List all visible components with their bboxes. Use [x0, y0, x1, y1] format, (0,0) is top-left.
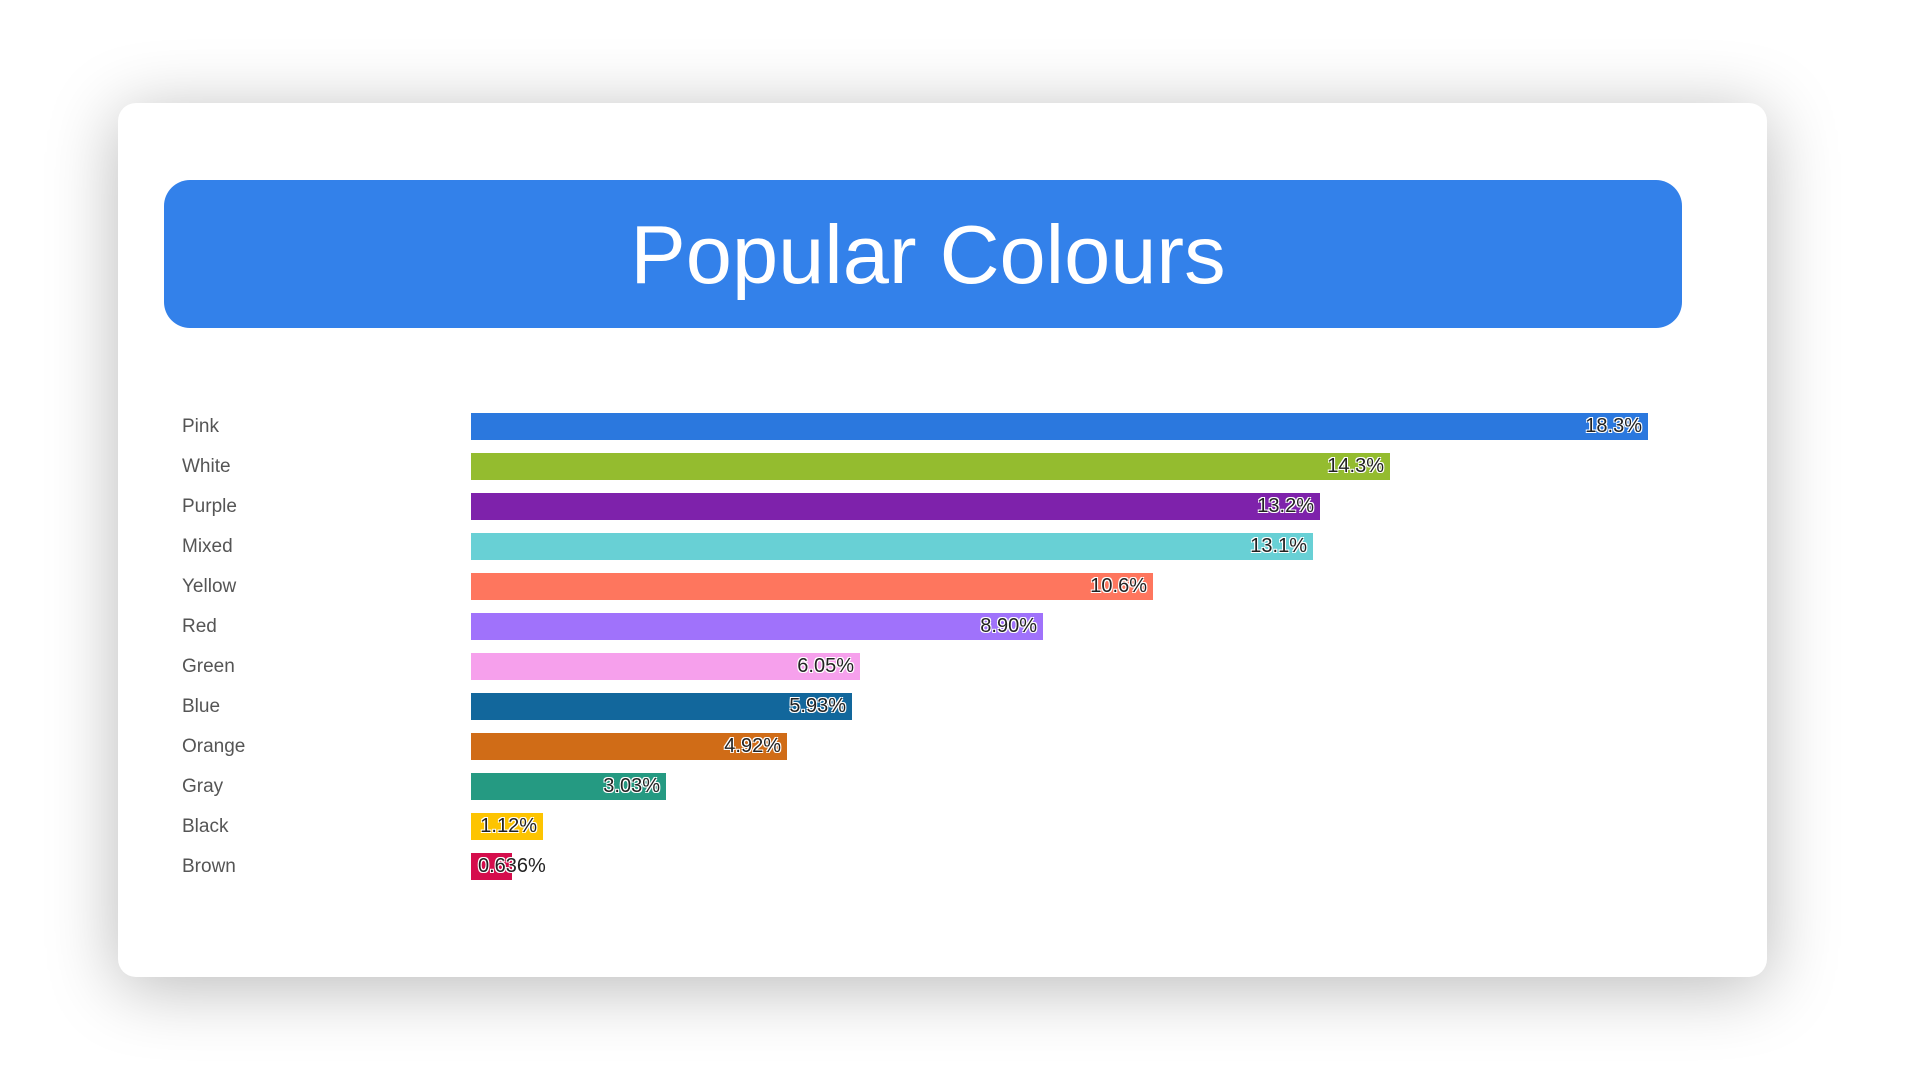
bar: Green: Green	[182, 656, 235, 677]
bar: White: 14.3%	[1327, 455, 1384, 477]
bar: Brown: 0.636%	[478, 855, 546, 877]
bar: Brown: Brown	[182, 856, 236, 877]
title	[164, 180, 1682, 328]
bar: Green: 6.05%	[797, 655, 854, 677]
bar: White: White	[182, 456, 231, 477]
bar: White	[182, 453, 1390, 480]
bar chart	[182, 413, 1648, 880]
bar: Mixed: 13.1%	[1250, 535, 1307, 557]
bar: Blue: 5.93%	[789, 695, 846, 717]
card panel	[118, 103, 1767, 977]
bar: Mixed	[182, 533, 1313, 560]
bar: Pink: 18.3%	[1585, 415, 1642, 437]
bar: Blue: Blue	[182, 696, 220, 717]
bar: Pink: Pink	[182, 416, 219, 437]
bar: Gray	[182, 773, 666, 800]
bar: Purple: Purple	[182, 496, 237, 517]
bar: Yellow: 10.6%	[1090, 575, 1147, 597]
bar: Red	[182, 613, 1043, 640]
bar: Orange	[182, 733, 787, 760]
bar: Pink	[182, 413, 1648, 440]
bar: Brown	[182, 853, 546, 880]
bar: Red: 8.90%	[980, 615, 1037, 637]
bar: Red: Red	[182, 616, 217, 637]
bar: Gray: Gray	[182, 776, 223, 797]
bar: Black	[182, 813, 543, 840]
bar: Yellow: Yellow	[182, 576, 236, 597]
bar: Gray: 3.03%	[603, 775, 660, 797]
bar: Mixed: Mixed	[182, 536, 233, 557]
title: Popular Colours	[630, 208, 1226, 301]
bar: Green	[182, 653, 860, 680]
bar: Blue	[182, 693, 852, 720]
bar: Purple: 13.2%	[1257, 495, 1314, 517]
bar: Yellow	[182, 573, 1153, 600]
bar: Orange: 4.92%	[724, 735, 781, 757]
bar: Orange: Orange	[182, 736, 245, 757]
bar: Black: Black	[182, 816, 228, 837]
bar: Purple	[182, 493, 1320, 520]
bar: Black: 1.12%	[480, 815, 537, 837]
